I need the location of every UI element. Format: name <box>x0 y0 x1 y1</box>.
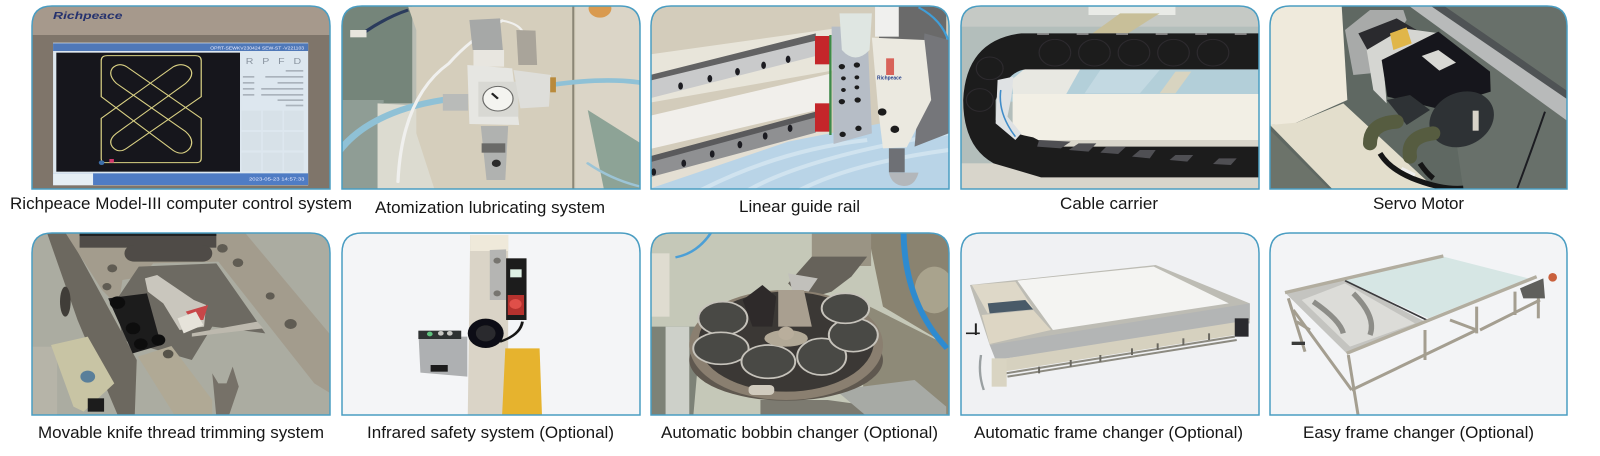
frame <box>32 6 330 189</box>
panel: Infrared safety system (Optional) <box>339 230 645 442</box>
photo: bobbin carousel <box>646 230 954 420</box>
photo: automatic frame changer machine <box>956 230 1264 420</box>
frame <box>1270 233 1567 415</box>
caption: Linear guide rail <box>739 197 860 216</box>
panel: Linear guide rail <box>646 3 954 216</box>
caption: Automatic bobbin changer (Optional) <box>661 423 938 442</box>
frame <box>961 6 1259 189</box>
caption: Automatic frame changer (Optional) <box>974 423 1243 442</box>
frame <box>651 233 949 415</box>
panel: Automatic frame changer (Optional) <box>956 230 1264 442</box>
panel: Movable knife thread trimming system <box>29 230 335 442</box>
photo: black cable chain <box>956 3 1266 193</box>
photo: thread trimmer <box>29 230 335 420</box>
photo: control screen: R P F D <box>246 57 301 67</box>
frame <box>651 6 949 189</box>
photo: linear rails and sewing head <box>646 3 954 193</box>
caption: Atomization lubricating system <box>375 198 605 217</box>
frame <box>342 6 640 189</box>
panel: Richpeace Model-III computer control system <box>10 3 352 213</box>
caption: Movable knife thread trimming system <box>38 423 324 442</box>
photo: control screen: OPRT-SEWKV230424 SEW-ST -V221103 <box>210 46 304 51</box>
panel: Servo Motor <box>1267 3 1570 213</box>
caption: Cable carrier <box>1060 194 1158 213</box>
caption: Infrared safety system (Optional) <box>367 423 614 442</box>
frame <box>342 233 640 415</box>
caption: Easy frame changer (Optional) <box>1303 423 1534 442</box>
photo: air regulator on machine <box>339 0 645 193</box>
panel: Easy frame changer (Optional) <box>1267 230 1570 442</box>
photo: control screen: Richpeace <box>53 11 123 22</box>
panel: Atomization lubricating system <box>339 0 645 217</box>
photo: infrared sensors on post <box>339 230 645 420</box>
photo: easy frame changer table <box>1267 230 1570 420</box>
photo: control screen: 2023-05-23 14:57:33 <box>249 177 305 182</box>
panel: Automatic bobbin changer (Optional) <box>646 230 954 442</box>
photo: linear rails and sewing head: Richpeace <box>877 76 902 81</box>
caption: Servo Motor <box>1373 194 1464 213</box>
caption: Richpeace Model-III computer control system <box>10 194 352 213</box>
frame <box>1270 6 1567 189</box>
photo: control screen <box>29 3 335 193</box>
photo: servo motor <box>1267 3 1570 193</box>
frame <box>961 233 1259 415</box>
frame <box>32 233 330 415</box>
panel: Cable carrier <box>956 3 1266 213</box>
